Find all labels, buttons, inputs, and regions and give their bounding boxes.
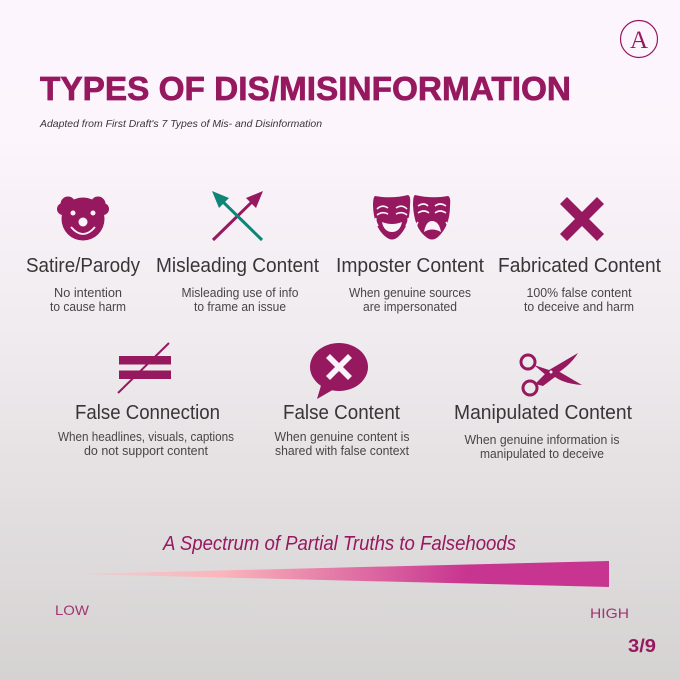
description: Fabricated Content: to deceive and harm: [524, 300, 634, 314]
icon: clown face: [57, 196, 109, 240]
heading: Satire/Parody: Satire/Parody: [26, 255, 140, 277]
icon: comedy mask: [373, 195, 410, 240]
label: high: HIGH: [590, 605, 629, 621]
icon: speech bubble with cross: [310, 343, 368, 399]
panel: False Content: [274, 343, 410, 458]
icon: tragedy mask: [413, 195, 450, 240]
description: Manipulated Content: [464, 433, 620, 461]
logo: circled A: A: [630, 27, 648, 54]
spectrum heading: A Spectrum of Partial Truths to Falsehoods: [162, 533, 516, 555]
description: Satire/Parody: [50, 286, 126, 314]
icon: theatre masks: [373, 195, 450, 240]
subtitle: Adapted from First Draft's 7 Types of Mis- and Disinformation: [39, 118, 322, 130]
description: False Connection: When headlines, visuals, captions: [58, 430, 234, 444]
panel: False Connection: [58, 343, 234, 458]
description: Satire/Parody: No intention: [54, 286, 122, 300]
panel: Fabricated Content: [498, 197, 661, 314]
description: Manipulated Content: manipulated to deceive: [480, 447, 604, 461]
description: False Connection: [58, 430, 234, 458]
description: Imposter Content: When genuine sources: [349, 286, 471, 300]
label: low: LOW: [55, 602, 90, 618]
description: Satire/Parody: to cause harm: [50, 300, 126, 314]
panel: Manipulated Content: [454, 353, 632, 461]
description: False Content: shared with false context: [275, 444, 410, 458]
heading: False Connection: False Connection: [75, 402, 220, 424]
heading: False Content: False Content: [283, 402, 400, 424]
description: False Content: [274, 430, 410, 458]
heading: Imposter Content: Imposter Content: [336, 255, 484, 277]
heading: Misleading Content: Misleading Content: [156, 255, 319, 277]
description: False Connection: do not support content: [84, 444, 209, 458]
description: False Content: When genuine content is: [274, 430, 410, 444]
heading: Manipulated Content: Manipulated Content: [454, 402, 632, 424]
description: Imposter Content: [349, 286, 471, 314]
panel: Misleading Content: [156, 191, 319, 314]
page number: 3/9: [628, 636, 656, 656]
description: Misleading Content: to frame an issue: [194, 300, 286, 314]
icon: not equal sign: [118, 343, 171, 393]
panel: Satire/Parody: [26, 196, 140, 314]
logo: circled A: [620, 20, 658, 58]
description: Imposter Content: are impersonated: [363, 300, 457, 314]
icon: cross: [560, 197, 604, 241]
description: Misleading Content: [182, 286, 299, 314]
description: Fabricated Content: 100% false content: [526, 286, 632, 300]
description: Fabricated Content: [524, 286, 634, 314]
description: Misleading Content: Misleading use of info: [182, 286, 299, 300]
icon: scissors: [521, 353, 582, 395]
heading: Fabricated Content: Fabricated Content: [498, 255, 661, 277]
title: TYPES OF DIS/MISINFORMATION: [40, 70, 571, 107]
spectrum wedge: [78, 561, 609, 587]
panel: Imposter Content: [336, 195, 484, 314]
icon: crossing arrows: [212, 191, 263, 240]
description: Manipulated Content: When genuine information is: [464, 433, 620, 447]
